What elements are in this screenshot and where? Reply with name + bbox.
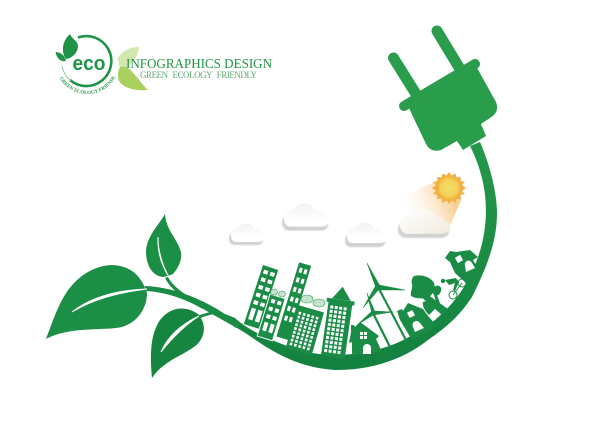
cloud 1: [229, 224, 264, 245]
cyclist: [441, 278, 466, 299]
leaf vein: [158, 237, 170, 279]
building 4: [286, 305, 324, 356]
plug prong left: [394, 58, 416, 94]
plug flange: [404, 64, 475, 106]
light leaf top: [118, 47, 139, 70]
leaf: large left: [46, 265, 147, 339]
wind turbine large: [363, 263, 407, 342]
wind turbine small: [357, 293, 393, 347]
leaf: lower: [151, 308, 204, 378]
lower twig: [197, 311, 217, 319]
subtitle text: GREEN ECOLOGY FRIENDLY: [140, 70, 258, 80]
logo small leaf: [56, 52, 66, 61]
building 1: [244, 265, 278, 329]
title text: INFOGRAPHICS DESIGN: [126, 57, 272, 72]
upper twig: [165, 277, 208, 309]
house 3: [445, 250, 480, 284]
house 2: [397, 303, 437, 340]
power plug: [394, 31, 497, 151]
leaf vein: [72, 289, 147, 312]
cloud 3: [345, 223, 386, 247]
building 2: [257, 294, 285, 341]
sun beam: [400, 180, 462, 226]
plug prong right: [437, 31, 460, 69]
light leaf bottom: [118, 67, 148, 90]
logo ring: [70, 36, 111, 86]
logo curved caption: [59, 77, 115, 94]
house 1: [349, 322, 382, 354]
tree large: [411, 275, 448, 315]
logo: eco badge: [56, 34, 116, 94]
logo eco word: eco: [72, 53, 106, 75]
logo large leaf: [63, 34, 78, 59]
leaf: top: [146, 214, 181, 279]
logo title leaves: [118, 47, 148, 90]
building 3: [276, 262, 311, 340]
sun rays: [432, 172, 466, 204]
small shrub: [433, 286, 441, 307]
cloud 2: [282, 204, 329, 231]
sun core: [436, 176, 462, 200]
cloud 4: [398, 209, 450, 238]
cable and ground swoosh: [205, 142, 497, 370]
sun: [432, 172, 466, 204]
tree small: [423, 301, 437, 315]
leaf vein: [161, 316, 199, 352]
plug body: [408, 66, 497, 151]
branch stem: [145, 286, 240, 328]
logo ring thin left arc: [62, 66, 71, 81]
building 5: [319, 285, 357, 359]
solar panels: [270, 289, 325, 307]
